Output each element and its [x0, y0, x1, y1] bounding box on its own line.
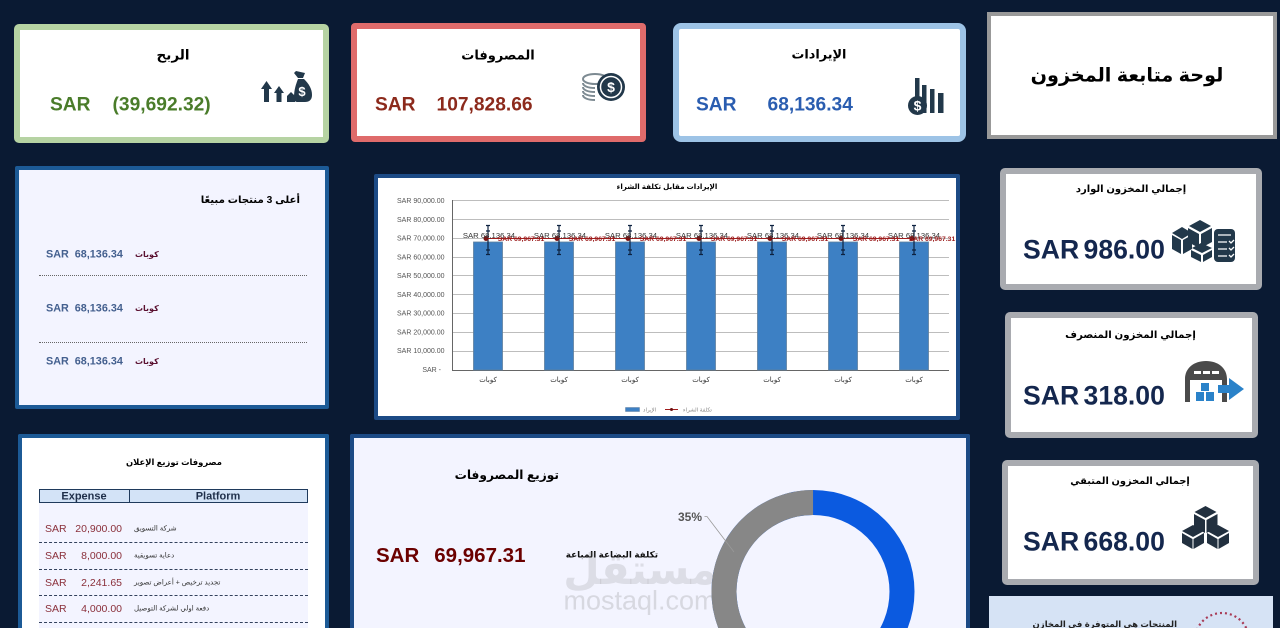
table row 1: 20,900.00: [75, 523, 122, 535]
percent label: 35%: [678, 510, 702, 524]
heading: inventory remaining: إجمالي المخزون المتبقي: [1070, 476, 1190, 487]
table row 3: 2,241.65: [81, 577, 122, 589]
bar chart: [397, 182, 956, 414]
leader line: [704, 516, 734, 552]
panel: advertising distribution expenses table: [18, 434, 329, 628]
line data labels: SAR 69,967.31: [640, 236, 686, 243]
donut chart: [678, 490, 914, 628]
y axis labels: SAR -: [422, 367, 442, 374]
icon: coin and bars: [908, 78, 944, 115]
value: inventory remaining: SAR 668.00: [1023, 527, 1165, 557]
category labels: كوبات: [763, 376, 781, 384]
line data labels: SAR 69,967.31: [711, 236, 757, 243]
amount: SAR 68,136.34: [46, 303, 123, 315]
icon: warehouse with outgoing arrow: [1185, 361, 1244, 402]
table row 1: [39, 503, 308, 543]
amount: SAR: [45, 577, 67, 589]
panel: total inventory remaining: [1002, 460, 1259, 585]
y axis labels: SAR 40,000.00: [397, 292, 445, 299]
heading: expenses: المصروفات: [461, 48, 535, 62]
product name: كوبات: [135, 250, 159, 259]
table: [39, 489, 308, 628]
heading: advertising expenses: مصروفات توزيع الإعلان: [126, 457, 222, 467]
row 3: [46, 356, 159, 368]
table row 2: [39, 543, 308, 570]
legend: الإيراد: [643, 408, 657, 414]
value: inventory issued: SAR 318.00: [1023, 381, 1165, 411]
platform name: شركة التسويق: [134, 526, 177, 532]
heading: profit: الربح: [157, 47, 189, 62]
bar data labels: SAR 68,136.34: [534, 231, 587, 240]
icon: boxes and checklist: [1172, 220, 1235, 262]
panel: revenue card: [673, 23, 966, 142]
line data labels: SAR 69,967.31: [909, 236, 955, 243]
row 1: [39, 235, 307, 276]
icon: money bag with rising arrows: $: [298, 84, 306, 99]
bar data labels: SAR 68,136.34: [817, 231, 870, 240]
platform name: تجديد ترخيص + أعراض تصوير: [134, 580, 220, 586]
category labels: كوبات: [621, 376, 639, 384]
value: revenue: SAR 68,136.34: [696, 94, 853, 115]
y axis labels: SAR 10,000.00: [397, 348, 445, 355]
y axis labels: SAR 60,000.00: [397, 254, 445, 262]
category labels: كوبات: [550, 376, 568, 384]
bar data labels: SAR 68,136.34: [463, 231, 516, 240]
amount: SAR: [45, 603, 67, 615]
category labels: كوبات: [479, 376, 497, 384]
y axis labels: SAR 80,000.00: [397, 217, 445, 224]
icon: stacked cubes: [1182, 506, 1229, 549]
icon: money bag with rising arrows: [261, 71, 312, 102]
icon: stacked coins: [582, 73, 625, 101]
value: inventory in: SAR 986.00: [1023, 235, 1165, 265]
platform name: دفعة اولي لشركة التوصيل: [134, 606, 209, 612]
amount: SAR: [45, 550, 67, 562]
table row 2: 8,000.00: [81, 550, 122, 562]
icon: stacked coins: $: [607, 79, 615, 95]
heading: top 3 products: أعلى 3 منتجات مبيعًا: [201, 195, 300, 206]
value: profit: SAR (39,692.32): [50, 94, 211, 115]
category labels: كوبات: [834, 376, 852, 384]
heading: inventory issued: إجمالي المخزون المنصرف: [1065, 329, 1196, 340]
line data labels: SAR 69,967.31: [782, 236, 828, 243]
y axis labels: SAR 30,000.00: [397, 310, 445, 318]
panel: expenses card: [351, 23, 646, 142]
panel: top 3 products: [15, 166, 329, 409]
legend: [626, 406, 712, 414]
panel: revenue vs purchase cost chart: [374, 174, 960, 420]
line series: purchase cost: [484, 236, 914, 241]
y axis labels: SAR 70,000.00: [397, 236, 445, 242]
table header: [39, 489, 308, 503]
bar data labels: SAR 68,136.34: [605, 231, 658, 240]
line data labels: SAR 69,967.31: [498, 236, 544, 243]
bars: revenue: [474, 242, 928, 370]
y axis labels: SAR 50,000.00: [397, 273, 445, 280]
heading: revenue: الإيرادات: [792, 47, 846, 62]
product name: كوبات: [135, 304, 159, 313]
watermark: [563, 546, 717, 616]
y axis labels: SAR 20,000.00: [397, 330, 445, 336]
line data labels: [498, 236, 955, 243]
panel: expense distribution: [350, 434, 970, 628]
watermark logo text: مستقل: [563, 546, 717, 593]
panel: dashboard title: [987, 12, 1277, 139]
title: لوحة متابعة المخزون: [1031, 65, 1223, 86]
panel: total inventory in: [1000, 168, 1262, 290]
value: expenses: SAR 107,828.66: [375, 94, 533, 115]
table row 4: 4,000.00: [81, 603, 122, 615]
bar data labels: [463, 231, 941, 240]
heading: expense distribution: توزيع المصروفات: [455, 468, 559, 482]
label: cost of goods sold: تكلفة البضاعة المباعة: [566, 550, 658, 560]
watermark url: mostaql.com: [563, 586, 717, 616]
chart title: الإيرادات مقابل تكلفة الشراء: [617, 182, 717, 191]
y axis labels: [397, 198, 445, 374]
column: expense: Expense: [61, 490, 107, 502]
platform name: دعاية تسويقية: [134, 552, 174, 560]
column: platform: Platform: [196, 490, 240, 502]
bar data labels: SAR 68,136.34: [676, 231, 729, 240]
panel: total inventory issued: [1005, 312, 1258, 438]
product name: كوبات: [135, 357, 159, 366]
table row 3: [39, 570, 308, 596]
line data labels: SAR 69,967.31: [569, 236, 615, 243]
panel: bottom note: [989, 596, 1273, 628]
category labels: [479, 376, 923, 384]
category labels: كوبات: [692, 376, 710, 384]
icon: dotted stamp: [1196, 612, 1248, 628]
y axis labels: SAR 90,000.00: [397, 198, 445, 205]
panel: profit card: [14, 24, 329, 143]
value: cost of goods sold: SAR 69,967.31: [376, 544, 525, 567]
donut segment: 35%: [689, 467, 937, 628]
line data labels: SAR 69,967.31: [853, 236, 899, 243]
error bars: [486, 225, 916, 255]
amount: SAR: [45, 523, 67, 535]
icon: coin and bars: $: [914, 98, 922, 114]
legend: تكلفة الشراء: [683, 406, 712, 414]
bar data labels: SAR 68,136.34: [888, 231, 941, 240]
category labels: كوبات: [905, 376, 923, 384]
table row 4: [39, 596, 308, 623]
bar data labels: SAR 68,136.34: [747, 231, 800, 240]
heading: inventory in: إجمالي المخزون الوارد: [1076, 184, 1186, 195]
amount: SAR 68,136.34: [46, 356, 123, 368]
row 2: [39, 276, 307, 343]
amount: SAR 68,136.34: [46, 249, 123, 261]
